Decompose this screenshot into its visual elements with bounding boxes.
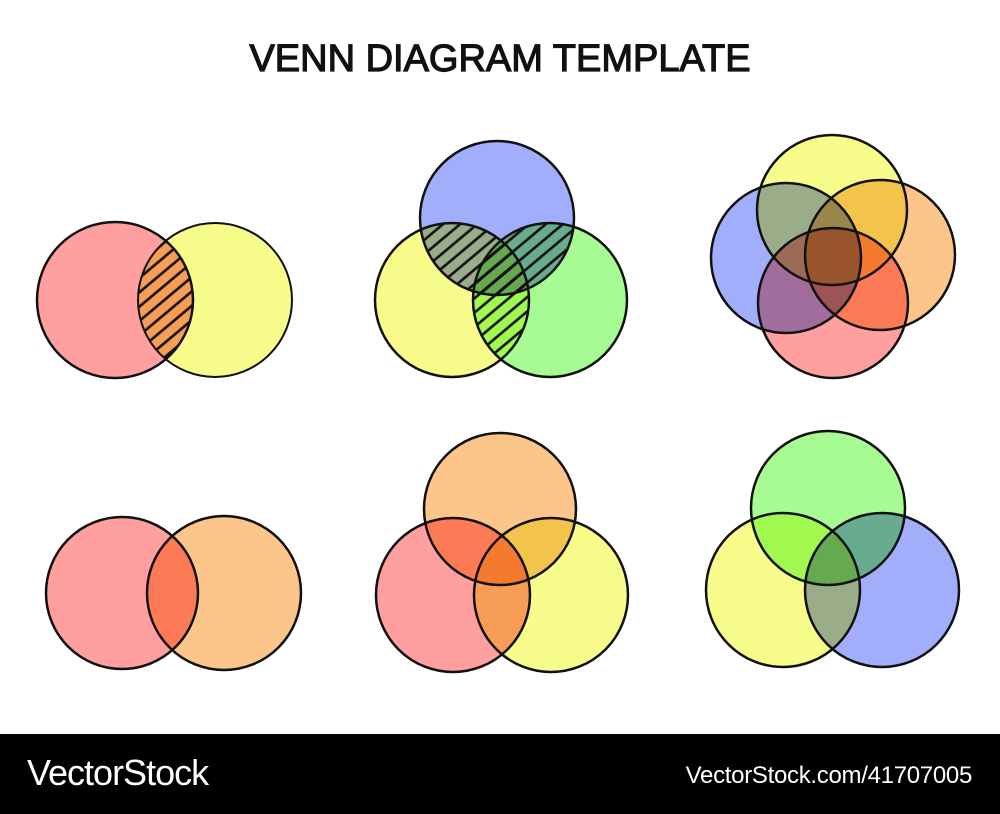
url: VectorStock.com/41707005 xyxy=(686,762,972,789)
diagram 2: three circles hatched xyxy=(375,141,627,377)
diagram 1: two circles hatched xyxy=(37,222,292,378)
diagram 3: four circles xyxy=(711,135,955,378)
footer xyxy=(0,734,1000,814)
title: VENN DIAGRAM TEMPLATE xyxy=(249,38,751,80)
brand: VectorStock xyxy=(27,752,208,793)
diagram 6: three circles xyxy=(706,431,959,667)
diagram 4: two circles xyxy=(46,516,301,670)
diagram 5: three circles xyxy=(376,433,628,672)
